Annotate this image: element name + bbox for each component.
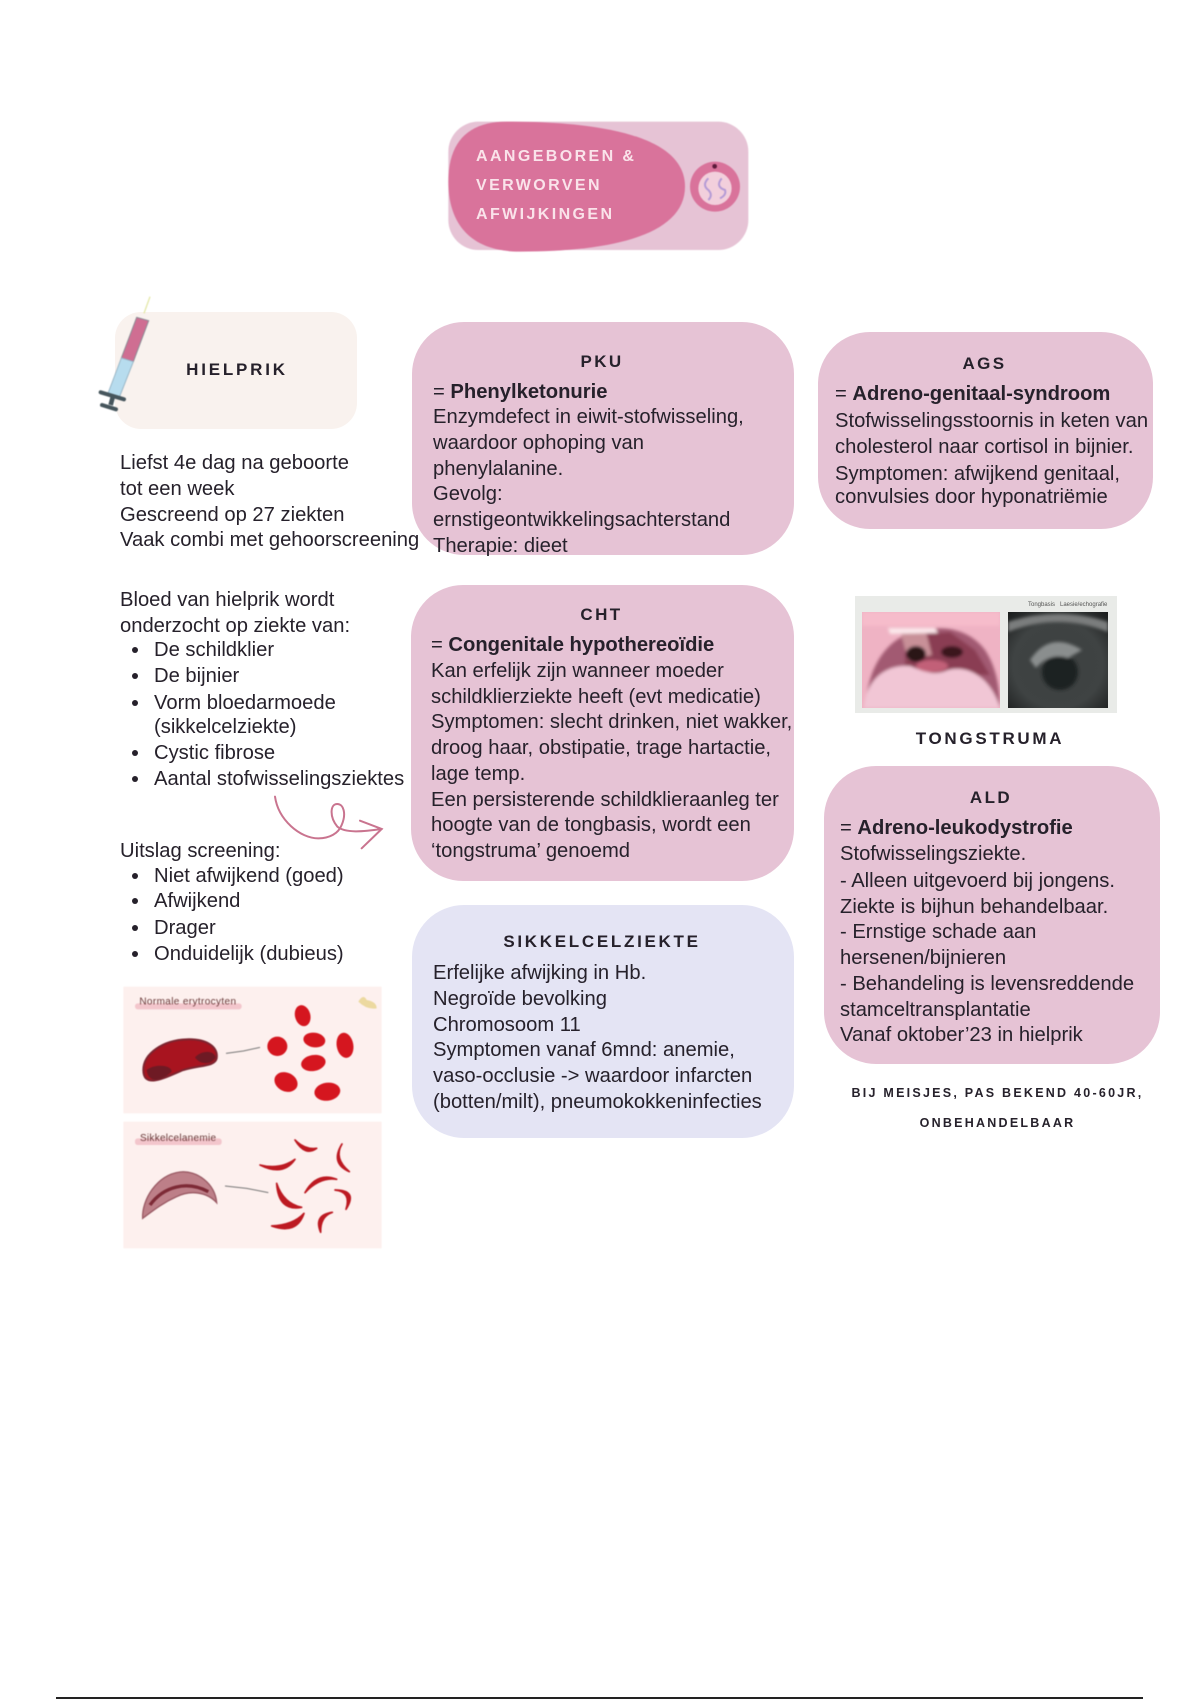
text: PKU description [433, 381, 744, 557]
illustration: normale erytrocyten: Normale erytrocyten [139, 997, 236, 1008]
illustration: normale erytrocyten [124, 986, 382, 1114]
text: PKU description: Therapie: dieet [433, 535, 568, 557]
text: CHT description: schildklierziekte heeft (evt medicatie) [431, 686, 761, 708]
text: CHT description: Kan erfelijk zijn wanneer moeder [431, 660, 724, 682]
note: ALD bij meisjes [852, 1086, 1143, 1130]
text block: uitslag screening: Afwijkend [154, 890, 240, 912]
text: sikkelcelziekte description [433, 962, 762, 1113]
text: CHT description: hoogte van de tongbasis, wordt een [431, 814, 751, 836]
text: ALD description: hersenen/bijnieren [840, 947, 1006, 969]
text block: onderzochte ziekten: (sikkelcelziekte) [154, 716, 296, 738]
text: ALD description: Stofwisselingsziekte. [840, 843, 1026, 865]
text: ALD description: Ziekte is bijhun behandelbaar. [840, 896, 1108, 918]
text: CHT description: ‘tongstruma’ genoemd [431, 840, 630, 862]
title text: AFWIJKINGEN [476, 206, 614, 223]
heading: PKU: PKU [580, 352, 624, 371]
text: PKU description: phenylalanine. [433, 458, 563, 480]
text block: hielprik timing: Vaak combi met gehoorscreening [120, 529, 419, 551]
text block: onderzochte ziekten: De schildklier [154, 639, 274, 661]
text block: hielprik timing: Liefst 4e dag na geboorte [120, 452, 349, 474]
heading: hielprik: HIELPRIK [186, 360, 288, 379]
text block: onderzochte ziekten: De bijnier [154, 665, 239, 687]
text: CHT description: Symptomen: slecht drinken, niet wakker, [431, 711, 792, 733]
text: ALD description: - Ernstige schade aan [840, 921, 1036, 943]
heading: sikkelcelziekte: SIKKELCELZIEKTE [503, 932, 701, 951]
text: sikkelcelziekte description: Chromosoom 11 [433, 1014, 581, 1036]
text: sikkelcelziekte description: (botten/milt), pneumokokkeninfecties [433, 1091, 762, 1113]
text: PKU description: Gevolg: [433, 483, 503, 505]
text block: uitslag screening: Niet afwijkend (goed) [154, 865, 344, 887]
text block: hielprik timing: tot een week [120, 478, 234, 500]
text block: onderzochte ziekten: Cystic fibrose [154, 742, 275, 764]
text: CHT description: lage temp. [431, 763, 525, 785]
heading: ALD: ALD [970, 788, 1012, 807]
panel: AGS [818, 332, 1153, 529]
text: AGS description: convulsies door hyponatriëmie [835, 486, 1108, 508]
text: CHT description: = Congenitale hypothereoïdie [431, 634, 714, 656]
text: AGS description: Symptomen: afwijkend genitaal, [835, 463, 1120, 485]
heading: CHT: CHT [580, 605, 623, 624]
text block: uitslag screening: Uitslag screening: [120, 840, 280, 862]
text block: onderzochte ziekten: Bloed van hielprik wordt [120, 589, 334, 611]
text: CHT description: Een persisterende schildklieraanleg ter [431, 789, 779, 811]
panel: ALD [824, 766, 1160, 1064]
text: PKU description: Enzymdefect in eiwit-stofwisseling, [433, 406, 744, 428]
text block: hielprik timing [120, 452, 419, 551]
text: AGS description: Stofwisselingsstoornis in keten van [835, 410, 1148, 432]
text block: uitslag screening: Drager [154, 917, 216, 939]
title text: AANGEBOREN & [476, 148, 636, 165]
illustration: sikkelcelanemie: Sikkelcelanemie [140, 1133, 216, 1144]
text block: uitslag screening [120, 840, 344, 965]
photo: tongstruma mouth and ultrasound: Tongbasis [1028, 602, 1055, 608]
note: ALD bij meisjes: BIJ MEISJES, PAS BEKEND 40-60JR, [852, 1086, 1143, 1100]
panel: hielprik heading [115, 312, 357, 429]
text: ALD description: Vanaf oktober’23 in hielprik [840, 1024, 1083, 1046]
text block: onderzochte ziekten [120, 589, 404, 790]
text: PKU description: waardoor ophoping van [433, 432, 644, 454]
text: AGS description: cholesterol naar cortisol in bijnier. [835, 436, 1133, 458]
photo: tongstruma mouth and ultrasound: Laesie/echografie [1060, 602, 1108, 608]
text: CHT description: droog haar, obstipatie, trage hartactie, [431, 737, 771, 759]
text: ALD description: = Adreno-leukodystrofie [840, 817, 1073, 839]
arrow: curly pink arrow [274, 796, 384, 850]
illustration: sikkelcelanemie [124, 1122, 382, 1248]
panel: sikkelcelziekte [412, 905, 794, 1138]
text block: onderzochte ziekten: Vorm bloedarmoede [154, 692, 336, 714]
text block: uitslag screening: Onduidelijk (dubieus) [154, 943, 344, 965]
text: PKU description: ernstigeontwikkelingsachterstand [433, 509, 730, 531]
text block: onderzochte ziekten: Aantal stofwisselingsziektes [154, 768, 404, 790]
icon: syringe [98, 296, 151, 412]
text: ALD description [840, 817, 1134, 1046]
title text: VERWORVEN [476, 177, 602, 194]
text block: onderzochte ziekten: onderzocht op ziekte van: [120, 615, 350, 637]
text: ALD description: - Behandeling is levensreddende [840, 973, 1134, 995]
banner shape with icon [448, 120, 749, 252]
text: AGS description: = Adreno-genitaal-syndroom [835, 383, 1110, 405]
text: sikkelcelziekte description: Negroïde bevolking [433, 988, 607, 1010]
heading: AGS: AGS [962, 354, 1007, 373]
text: sikkelcelziekte description: Symptomen vanaf 6mnd: anemie, [433, 1039, 735, 1061]
note: ALD bij meisjes: ONBEHANDELBAAR [920, 1116, 1075, 1130]
panel: PKU [412, 322, 794, 555]
text: sikkelcelziekte description: Erfelijke afwijking in Hb. [433, 962, 646, 984]
text: PKU description: = Phenylketonurie [433, 381, 607, 403]
panel: CHT [411, 585, 794, 881]
title text [476, 148, 636, 223]
text: CHT description [431, 634, 792, 862]
text block: hielprik timing: Gescreend op 27 ziekten [120, 504, 344, 526]
text: ALD description: - Alleen uitgevoerd bij jongens. [840, 870, 1115, 892]
text: sikkelcelziekte description: vaso-occlusie -> waardoor infarcten [433, 1065, 752, 1087]
photo: tongstruma mouth and ultrasound [855, 596, 1117, 713]
heading: tongstruma: TONGSTRUMA [916, 729, 1064, 748]
text: ALD description: stamceltransplantatie [840, 999, 1031, 1021]
title banner [448, 120, 749, 252]
text: AGS description [835, 383, 1148, 508]
